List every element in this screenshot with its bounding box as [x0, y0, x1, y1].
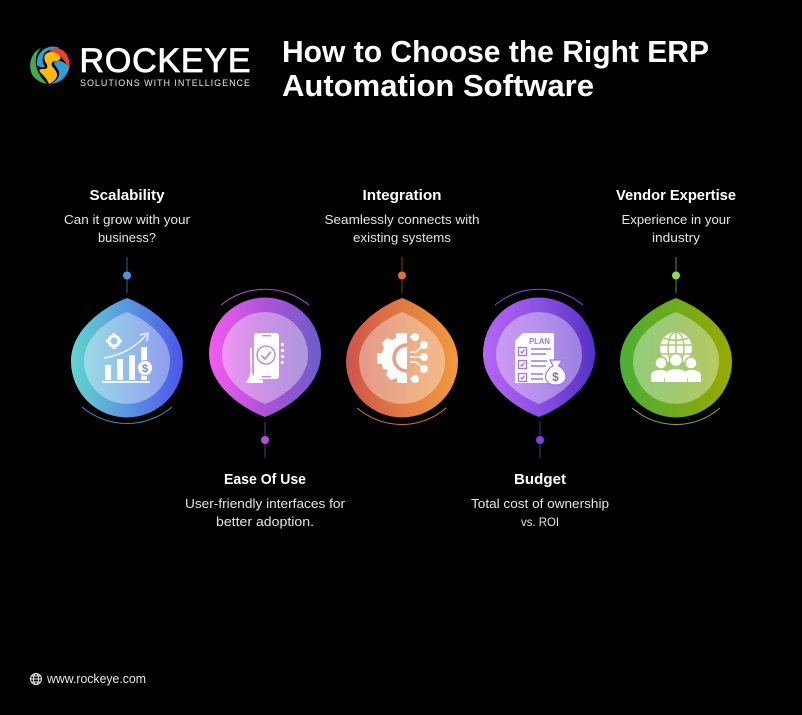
- text block: Budget description: vs. ROI: [521, 515, 559, 529]
- teardrop inner: [633, 312, 719, 404]
- arc: [82, 407, 172, 424]
- text block: Integration description: [324, 212, 480, 245]
- teardrop inner: [222, 312, 308, 404]
- footer: website: [30, 671, 146, 686]
- teardrop badge: [346, 298, 458, 418]
- teardrop badge: [71, 298, 183, 418]
- arc: [357, 408, 446, 424]
- heading: Budget: Budget: [514, 471, 566, 488]
- icon: half gear circuit: [377, 333, 428, 383]
- step: Budget: [471, 289, 609, 529]
- connector with dot: [261, 422, 269, 458]
- connector with dot: [536, 422, 544, 458]
- heading: Integration: Integration: [362, 187, 442, 204]
- text block: Budget description: [471, 496, 609, 529]
- title: [282, 34, 709, 103]
- text block: Integration description: existing systems: [353, 230, 451, 245]
- step: Ease Of Use: [185, 289, 346, 529]
- text block: Scalability description: [64, 212, 191, 245]
- text block: Budget description: Total cost of ownership: [471, 496, 609, 511]
- icon: growth chart: [102, 333, 152, 383]
- connector with dot: [398, 257, 406, 293]
- icon: global team: [651, 332, 701, 382]
- text block: Integration description: Seamlessly connects with: [324, 212, 480, 227]
- title: Automation Software: [282, 68, 594, 103]
- heading: Scalability: Scalability: [90, 187, 165, 204]
- text block: Ease Of Use description: better adoption.: [216, 514, 314, 529]
- heading: Ease Of Use: Ease Of Use: [224, 471, 306, 488]
- step: Integration: [324, 187, 480, 424]
- text block: Ease Of Use description: User-friendly interfaces for: [185, 496, 346, 511]
- text block: Vendor Expertise description: Experience in your: [622, 212, 731, 227]
- teardrop inner: [496, 312, 582, 404]
- step: Scalability: [64, 187, 191, 424]
- connector with dot: [672, 257, 680, 293]
- text block: Scalability description: Can it grow with your: [64, 212, 191, 227]
- step: Vendor Expertise: [616, 187, 736, 424]
- text block: Vendor Expertise description: [622, 212, 731, 245]
- teardrop badge: [483, 298, 595, 417]
- teardrop badge: [209, 298, 321, 417]
- icon: phone in hand: [246, 333, 284, 383]
- teardrop inner: [84, 312, 170, 404]
- text block: Scalability description: business?: [98, 230, 156, 245]
- logo wordmark: ROCKEYE: [80, 42, 250, 80]
- icon: logo swirl: [30, 46, 70, 84]
- teardrop inner: [359, 312, 445, 404]
- arc: [221, 289, 309, 305]
- icon: plan with money bag: $: [552, 370, 559, 384]
- text block: Ease Of Use description: [185, 496, 346, 529]
- icon: growth chart: $: [142, 363, 148, 375]
- logo tagline: SOLUTIONS WITH INTELLIGENCE: [80, 78, 250, 88]
- icon: plan with money bag: [515, 333, 566, 385]
- icon: plan with money bag: PLAN: [529, 336, 550, 346]
- icon: globe: [30, 674, 42, 684]
- arc: [495, 289, 583, 305]
- title: How to Choose the Right ERP: [282, 34, 709, 69]
- heading: Vendor Expertise: Vendor Expertise: [616, 187, 736, 204]
- teardrop badge: [620, 298, 732, 418]
- text block: Vendor Expertise description: industry: [652, 230, 701, 245]
- connector with dot: [123, 257, 131, 293]
- arc: [632, 408, 720, 424]
- website text: www.rockeye.com: [46, 671, 146, 686]
- logo: Rockeye: [30, 42, 250, 88]
